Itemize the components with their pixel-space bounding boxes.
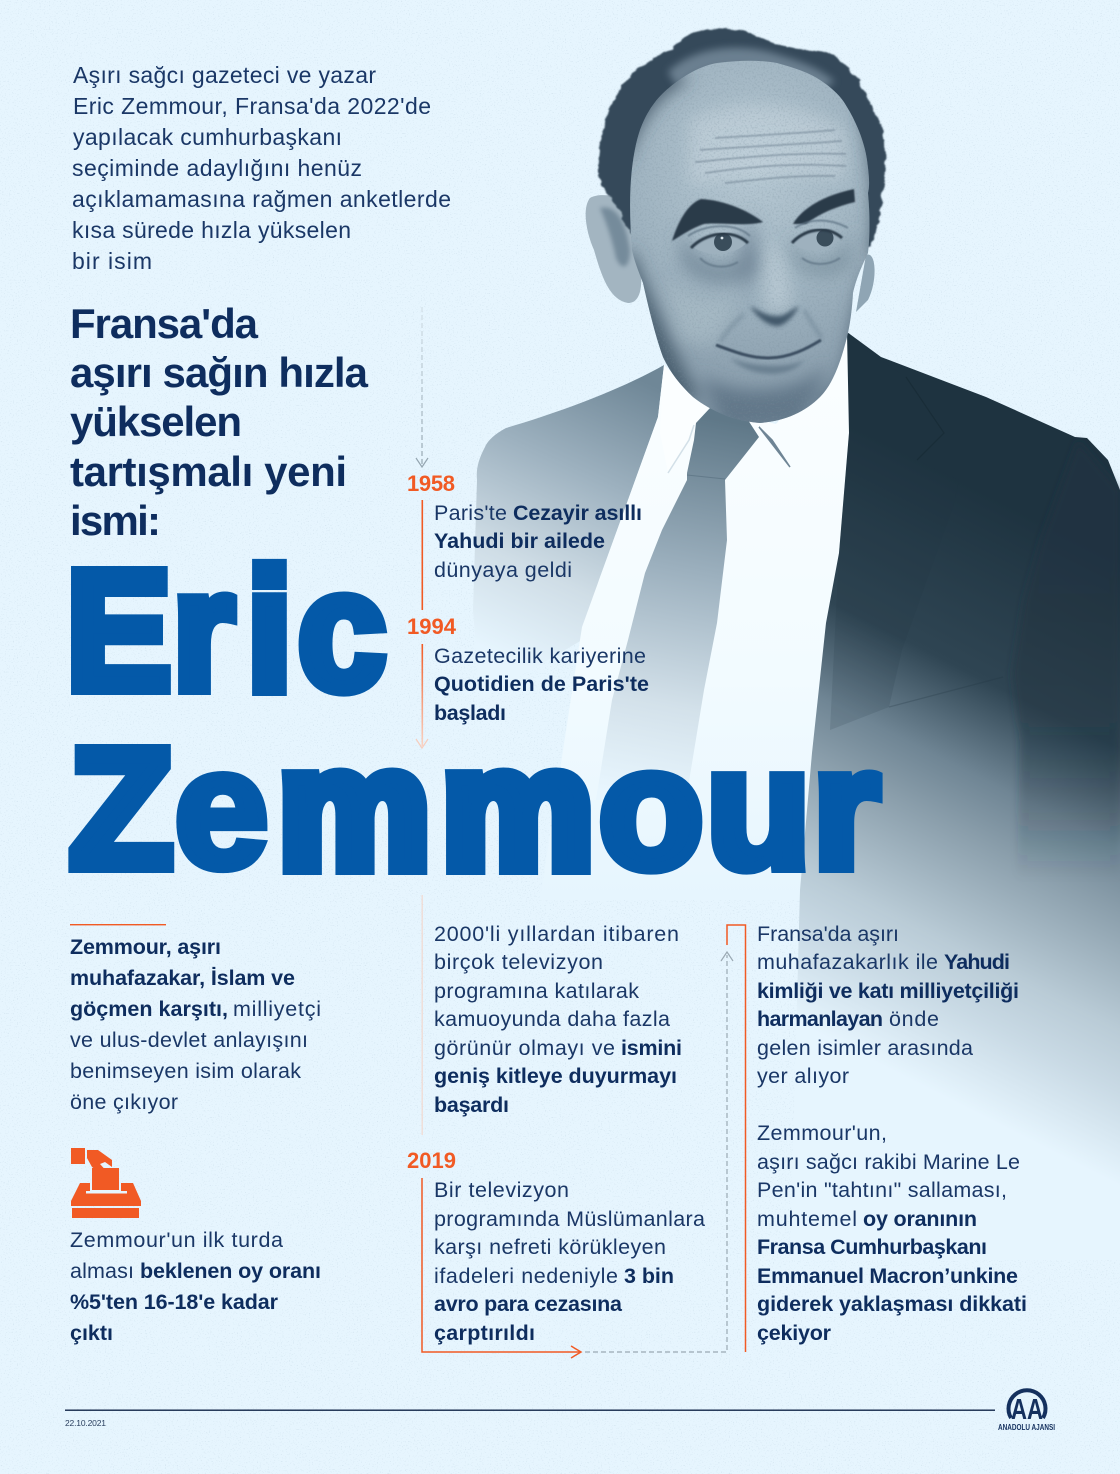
right column text 1: önde: [889, 1007, 939, 1031]
forehead wrinkles: [695, 130, 846, 183]
icon: ballot box: [71, 1148, 141, 1218]
right column text 2: [757, 1121, 1027, 1345]
intro text: [72, 62, 451, 274]
right column text 1: Fransa'da aşırı: [757, 922, 899, 946]
timeline 1958: dünyaya geldi: [434, 558, 572, 582]
left column text 1: öne çıkıyor: [70, 1090, 178, 1114]
right column text 1: Yahudi: [944, 950, 1010, 974]
logo: Anadolu Ajansi: [998, 1390, 1055, 1432]
lapel edge: [906, 377, 944, 460]
timeline 2019: programında Müslümanlara: [434, 1207, 705, 1231]
intro text: açıklamamasına rağmen anketlerde: [72, 186, 451, 212]
arrow: dashed connector up: [585, 952, 733, 1352]
intro text: Aşırı sağcı gazeteci ve yazar: [73, 62, 376, 88]
timeline 2019: karşı nefreti körükleyen: [434, 1235, 666, 1259]
left column text 2: çıktı: [70, 1321, 113, 1345]
intro text: seçiminde adaylığını henüz: [72, 155, 362, 181]
left column text 1: göçmen karşıtı,: [70, 997, 228, 1021]
left column text 2: alması: [70, 1259, 134, 1283]
heading: ismi:: [70, 497, 161, 544]
timeline 1994: başladı: [434, 701, 506, 725]
right column text 2: giderek yaklaşması dikkati: [757, 1292, 1027, 1316]
left column text 1: milliyetçi: [233, 997, 321, 1021]
skin grain: [630, 62, 860, 385]
pocket: [889, 677, 1003, 707]
left column text 2: beklenen oy oranı: [140, 1259, 321, 1283]
right column text 2: oy oranının: [863, 1207, 977, 1231]
mouth: [716, 340, 821, 358]
left column text 2: [70, 1228, 321, 1345]
left column text 1: muhafazakar, İslam ve: [70, 966, 295, 990]
right column text 2: Zemmour'un,: [757, 1121, 887, 1145]
left column text 2: %5'ten 16-18'e kadar: [70, 1290, 279, 1314]
timeline 2000s: programına katılarak: [434, 979, 639, 1003]
right column text 1: yer alıyor: [757, 1064, 849, 1088]
intro text: yapılacak cumhurbaşkanı: [73, 124, 342, 150]
tie knot line: [687, 475, 725, 479]
heading: yükselen: [70, 398, 242, 445]
intro text: kısa sürede hızla yükselen: [72, 217, 351, 243]
left column text 1: ve ulus-devlet anlayışını: [70, 1028, 308, 1052]
right column text 1: kimliği ve katı milliyetçiliği: [757, 979, 1019, 1003]
right column text 1: gelen isimler arasında: [757, 1036, 973, 1060]
timeline 1994: 1994: [407, 614, 457, 639]
right column text 2: Emmanuel Macron’unkine: [757, 1264, 1018, 1288]
timeline 1958: Yahudi bir ailede: [434, 529, 605, 553]
right column text 1: muhafazakarlık ile: [757, 950, 938, 974]
timeline 1958: 1958: [407, 471, 455, 496]
nasolabial folds: [720, 310, 822, 342]
left column text 1: [70, 924, 321, 1114]
orange connector: [727, 925, 746, 1352]
nose: [750, 306, 799, 326]
timeline 2000s: geniş kitleye duyurmayı: [434, 1064, 677, 1088]
intro text: bir isim: [72, 248, 152, 274]
timeline 2000s: birçok televizyon: [434, 950, 603, 974]
eye folds and bags: [688, 220, 848, 267]
heading: aşırı sağın hızla: [70, 349, 369, 396]
timeline 2019: avro para cezasına: [434, 1292, 623, 1316]
jacket: [790, 332, 1120, 1260]
right column text 2: Fransa Cumhurbaşkanı: [757, 1235, 987, 1259]
title: Eric: Eric: [66, 535, 386, 725]
inner ear: [600, 208, 630, 266]
lower lip: [730, 358, 804, 374]
timeline 1958: Cezayir asıllı: [513, 501, 642, 525]
ear: [586, 195, 641, 303]
left column text 1: Zemmour, aşırı: [70, 935, 221, 959]
right column text 1: [757, 922, 1019, 1088]
logo: Anadolu Ajansi: AA: [1011, 1394, 1043, 1426]
timeline 2000s: [422, 895, 682, 1135]
right collar edge: [759, 427, 790, 467]
date: 22.10.2021: [65, 1418, 106, 1428]
footer rule: [65, 1410, 995, 1411]
timeline 2019: 3 bin: [624, 1264, 674, 1288]
timeline 1994: Quotidien de Paris'te: [434, 672, 649, 696]
timeline 2019: ifadeleri nedeniyle: [434, 1264, 618, 1288]
timeline connector: top dashed arrow: [416, 307, 428, 467]
timeline 2000s: kamuoyunda daha fazla: [434, 1007, 670, 1031]
timeline 2019: [407, 1148, 705, 1345]
timeline 2019: Bir televizyon: [434, 1178, 569, 1202]
thin hair top: [668, 48, 835, 90]
portrait photo: [473, 28, 1120, 1260]
tie: [596, 408, 759, 800]
timeline 2019: 2019: [407, 1148, 456, 1173]
right ear stub: [856, 254, 875, 312]
intro text: Eric Zemmour, Fransa'da 2022'de: [73, 93, 431, 119]
heading: Fransa'da: [70, 300, 259, 347]
eyebrows: [672, 199, 763, 241]
timeline 2000s: başardı: [434, 1093, 509, 1117]
right column text 1: harmanlayan: [757, 1007, 883, 1031]
lapel: [830, 340, 959, 730]
left column text 1: benimseyen isim olarak: [70, 1059, 301, 1083]
timeline 1994: [407, 614, 649, 748]
face: [630, 60, 870, 423]
hair: [598, 28, 885, 250]
right column text 2: muhtemel: [757, 1207, 857, 1231]
right column text 2: Pen'in "tahtını" sallaması,: [757, 1178, 1007, 1202]
sleeve shading: [1012, 440, 1120, 930]
timeline 2000s: 2000'li yıllardan itibaren: [434, 922, 679, 946]
logo: Anadolu Ajansi: ANADOLU AJANSI: [998, 1423, 1055, 1432]
timeline 1958: [407, 471, 642, 610]
left column text 2: Zemmour'un ilk turda: [70, 1228, 283, 1252]
arrow: timeline 2019 to right: [422, 1178, 581, 1358]
right column text 2: aşırı sağcı rakibi Marine Le: [757, 1150, 1020, 1174]
eyes: [693, 235, 746, 254]
heading: tartışmalı yeni: [70, 448, 347, 495]
timeline 2019: çarptırıldı: [434, 1321, 535, 1345]
timeline 1958: Paris'te: [434, 501, 507, 525]
left jacket shoulder: [473, 365, 664, 700]
right column text 2: çekiyor: [757, 1321, 832, 1345]
face shading: [632, 73, 870, 423]
timeline 2000s: ismini: [621, 1036, 682, 1060]
title: Zemmour: Zemmour: [69, 714, 879, 904]
timeline 2000s: görünür olmayı ve: [434, 1036, 615, 1060]
timeline 1994: Gazetecilik kariyerine: [434, 644, 646, 668]
shirt collar fold: [660, 367, 708, 473]
shirt: [540, 338, 849, 900]
forehead and nose highlights: [665, 106, 845, 345]
heading: [70, 300, 369, 544]
